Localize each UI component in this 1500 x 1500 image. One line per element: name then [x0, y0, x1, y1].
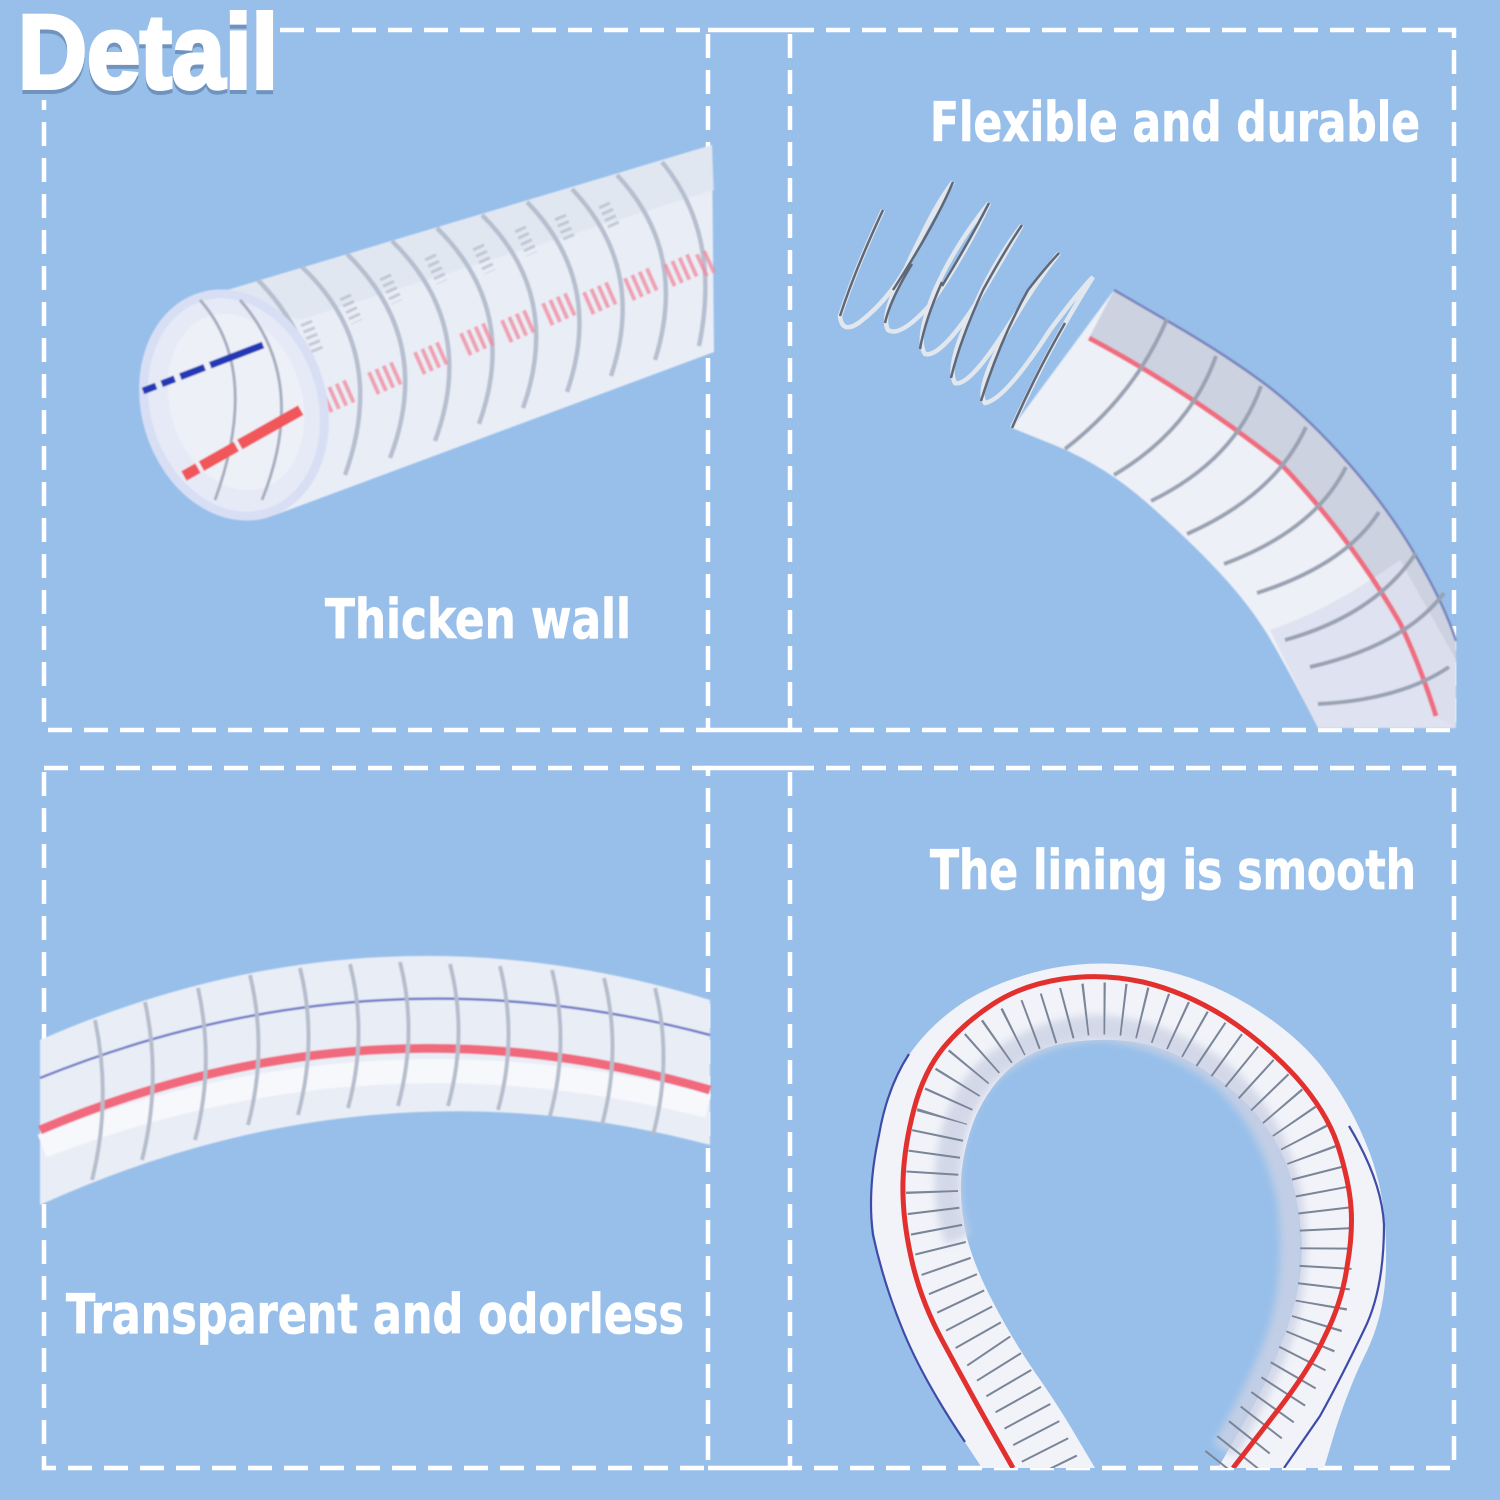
heading: thicken wall: Thicken wall [325, 588, 631, 651]
hose photo: arched hose [40, 956, 710, 1205]
heading: transparent and odorless: Transparent and odorless [66, 1283, 684, 1346]
darker upper band [1089, 290, 1456, 728]
top blue edge [1114, 290, 1456, 641]
ribs [932, 1008, 1326, 1468]
red stripe [1089, 338, 1436, 716]
hose photo: looped hose [871, 964, 1386, 1468]
icon: steel spring [840, 182, 1093, 428]
white highlight band [42, 1071, 708, 1146]
hose photo: thick wall straight hose [117, 145, 714, 539]
ribs [92, 962, 664, 1180]
printed marks on hose [306, 204, 614, 352]
panel: flexible and durable frame [790, 30, 1454, 730]
pink lower band [1270, 560, 1456, 728]
hose ribs [258, 162, 705, 492]
blue stripe [40, 999, 710, 1078]
wispy red stripe marks [325, 260, 713, 402]
blue stripe [143, 345, 263, 391]
panel: lining is smooth frame [790, 768, 1454, 1468]
blue stripes [871, 1054, 965, 1442]
translucent inner band [948, 1028, 1293, 1450]
hose photo: bent hose with exposed spring [1012, 290, 1456, 728]
panel: thicken wall frame [44, 30, 708, 730]
red stripe [903, 977, 1352, 1468]
panel connectors [708, 30, 790, 1468]
red stripe [184, 410, 301, 476]
red stripe [40, 1048, 710, 1130]
ribs [1065, 319, 1449, 704]
panel: transparent and odorless frame [44, 768, 708, 1468]
hose end ring [117, 271, 351, 539]
